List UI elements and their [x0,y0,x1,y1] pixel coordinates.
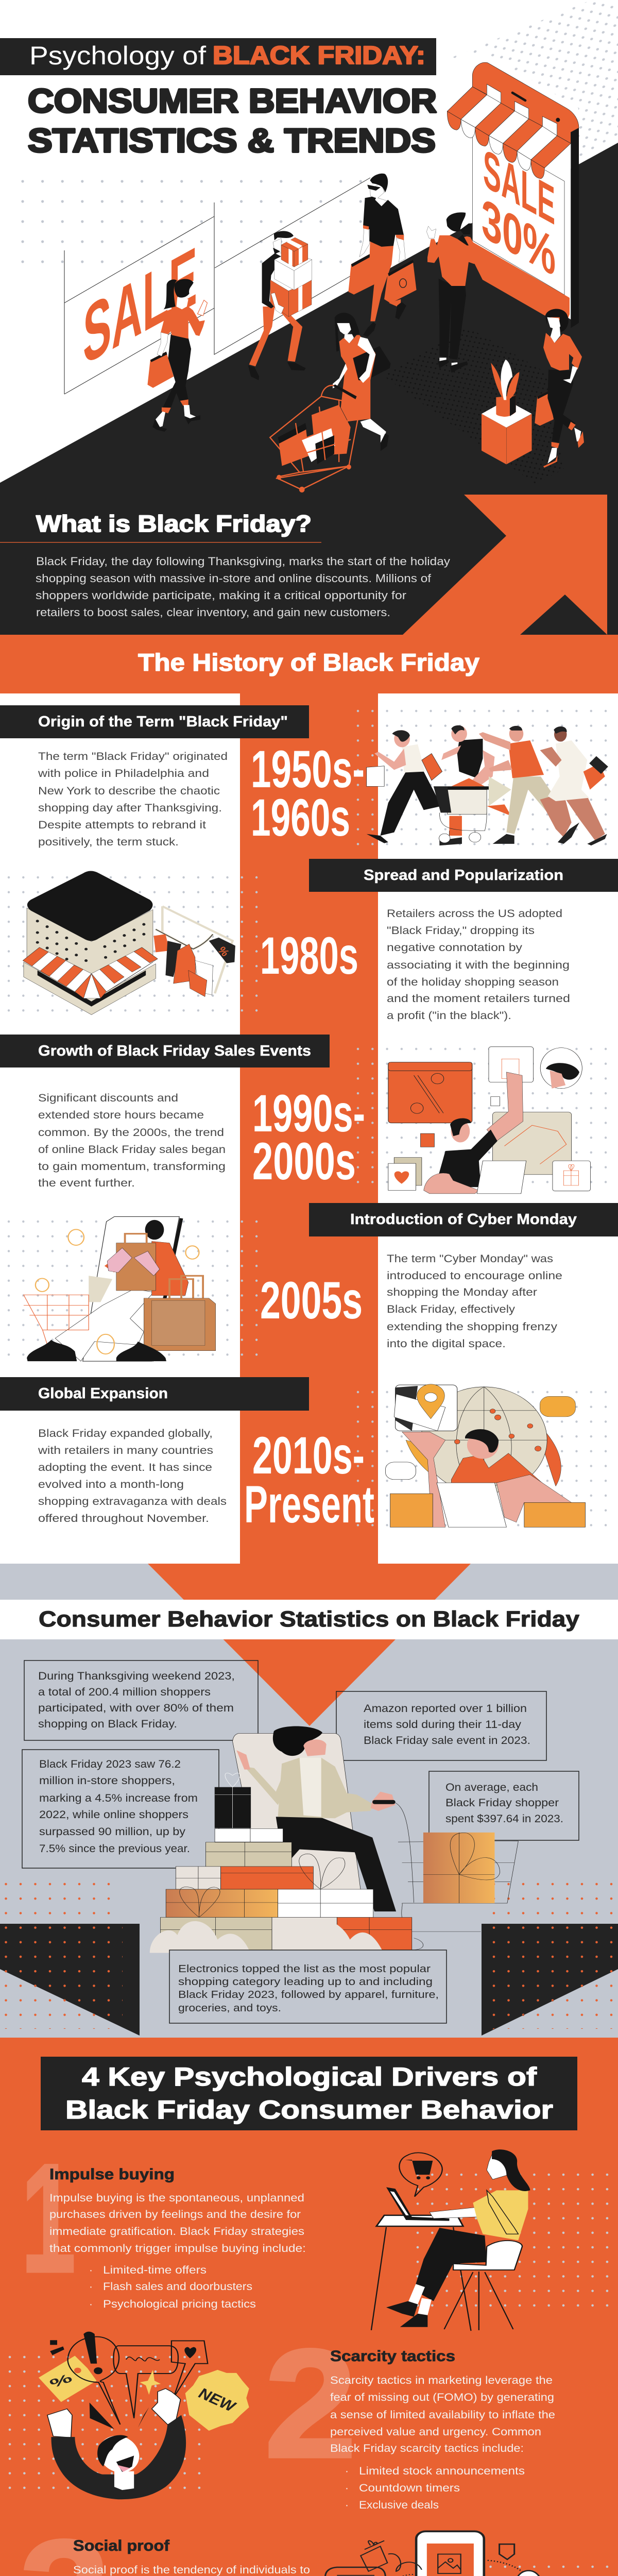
text: origin: The term "Black Friday" originated [38,751,228,762]
driver 2 heading: Scarcity tactics [330,2348,455,2365]
text: origin: with police in Philadelphia and [38,768,209,779]
stat box 5 [169,1950,447,2023]
text: origin: positively, the term stuck. [38,836,179,848]
stat box 4: Black Friday shopper [445,1797,559,1809]
drivers heading: 4 Key Psychological Drivers of [82,2062,537,2091]
hand [236,1750,250,1770]
message bubble [113,2346,178,2418]
gift stack [160,1773,412,1951]
phone picture [427,2544,474,2576]
inner shirt [300,1758,321,1817]
left awning [23,947,92,992]
what is black friday heading: What is Black Friday? [36,511,312,537]
bubble white [385,1462,416,1480]
driver 2 bullets: Exclusive deals [359,2499,439,2511]
stat box 1: a total of 200.4 million shoppers [38,1686,211,1698]
phone speaker [512,93,525,100]
bar: growth [0,1035,330,1067]
shopping cart [270,384,363,493]
stat box 3: 7.5% since the previous year. [39,1843,190,1855]
text: global: Black Friday expanded globally, [38,1428,213,1439]
phone frame [83,1216,179,1361]
date: 1950s-1960s: 1950s- [251,740,365,799]
shoppers right group [426,212,584,468]
cart frame [390,1801,518,1950]
shopper on right [535,309,584,468]
hair [145,1220,164,1240]
new text: NEW [195,2385,239,2415]
plus box [421,1133,434,1147]
driver 2 text [330,2375,555,2454]
dotted arc [488,2561,546,2576]
driver 1 bullets: · [89,2281,93,2293]
map card [394,1384,457,1431]
shield [500,2544,514,2560]
bar: origin: Origin of the Term "Black Friday" [38,714,288,730]
illustration: shopper with gifts [150,1726,518,1953]
phone [416,2531,484,2576]
arm [430,2208,477,2218]
what is black friday text: shopping season with massive in-store and online discounts. Millions of [36,572,432,585]
awning stripes [447,87,571,179]
bar: global [0,1377,309,1411]
timeline column [240,693,378,1564]
person glyph [50,2340,64,2355]
left arm [244,1760,300,1805]
wall sale text: SALE [83,229,197,383]
date: 1950s-1960s: 1960s [251,788,350,847]
illustration: social phone [325,2531,557,2576]
text: cyber monday: The term "Cyber Monday" was [387,1253,553,1265]
text: global: shopping extravaganza with deals [38,1496,227,1507]
arms body [51,2415,186,2499]
stat box 2: Black Friday sale event in 2023. [364,1735,530,1747]
gift box card [553,1161,590,1191]
main title: CONSUMER BEHAVIOR [28,82,437,120]
dotted line [388,2574,414,2576]
consumer section background [0,1564,618,2038]
dots: history [2,704,611,1527]
text: spread: associating it with the beginning [387,959,570,971]
stat box 4 [429,1771,579,1840]
text: growth: of online Black Friday sales began [38,1144,226,1156]
text: global: evolved into a month-long [38,1479,184,1490]
shopper pointing at phone [426,212,483,373]
timeline arrow [148,1564,471,1726]
date: 1990s-2000s [252,1084,365,1191]
paper bag [116,1243,156,1291]
driver 1 text: that commonly trigger impulse buying include: [49,2243,306,2255]
big bag [144,1276,216,1351]
corner awning fan [75,974,107,998]
illustration: running shoppers [367,725,608,845]
shirt [473,2190,528,2240]
driver 2 bullets: · [345,2499,349,2511]
new badge [185,2370,249,2431]
driver 1 bullets: Flash sales and doorbusters [103,2281,252,2293]
mouth [116,2455,134,2472]
stat box 1: shopping on Black Friday. [38,1718,177,1730]
driver 2 text: fear of missing out (FOMO) by generating [330,2392,554,2403]
stat box 3: million in-store shoppers, [39,1775,175,1787]
right awning [92,947,158,992]
orange arrow [403,495,607,635]
left corner shape [0,1924,140,2036]
hair [273,1726,322,1756]
phone percent text: 30% [482,185,556,289]
globe [421,1387,547,1494]
bar: spread: Spread and Popularization [364,867,563,884]
hero panel [0,0,618,635]
text: cyber monday [387,1253,562,1350]
pants [55,1289,153,1361]
date: 1990s-2000s: 2000s [252,1132,356,1191]
man pointing [479,726,568,844]
phone orange base [473,242,570,323]
driver 2 bullets: · [345,2465,349,2477]
wall frames [64,178,370,394]
orange dots [0,1877,613,2029]
bar: growth: Growth of Black Friday Sales Events [38,1043,311,1059]
bar: spread [309,859,618,892]
shoes [27,1340,166,1361]
driver 2 number: 2 [264,2317,357,2490]
title highlight: BLACK FRIDAY: [213,42,425,70]
orange dots on corners [0,1924,613,2032]
desk [371,2227,471,2331]
orange browser window [388,1062,472,1123]
stat box 5: Black Friday 2023, followed by apparel, furniture, [178,1989,439,2001]
date: 2005s: 2005s [260,1271,363,1330]
bubble yellow [540,1396,575,1417]
phone [233,1734,365,1920]
driver 1 text: immediate gratification. Black Friday strategies [49,2226,304,2238]
stat box 1 [24,1660,258,1740]
bar: cyber monday: Introduction of Cyber Monday [350,1211,577,1228]
head [92,2431,146,2477]
exclamation bubble [68,2332,120,2425]
stat box 1: participated, with over 80% of them [38,1702,234,1714]
text: spread: and the moment retailers turned [387,993,570,1005]
stat box 3: Black Friday 2023 saw 76.2 [39,1758,181,1770]
text: cyber monday: extending the shopping frenzy [387,1321,558,1333]
illustration: online shopping [388,1047,590,1194]
text: cyber monday: shopping the Monday after [387,1286,537,1298]
drivers heading [41,2057,577,2130]
picture icon [438,2554,461,2573]
store base [24,962,156,1015]
coat [152,1241,188,1296]
store walls [27,908,153,1002]
clouds [150,1920,384,1953]
dot field right [443,0,618,160]
gold gift in cart [423,1833,500,1903]
text: origin [38,751,228,848]
store roof [27,871,153,941]
tag percent: % [47,2371,75,2391]
text: global [38,1428,227,1524]
main title [28,82,437,159]
text: growth: common. By the 2000s, the trend [38,1127,224,1139]
gift card [489,1047,533,1082]
text: cyber monday: Black Friday, effectively [387,1303,516,1315]
speech bubble [325,2567,385,2576]
head [487,2153,508,2179]
gift icon [502,1059,519,1079]
hand arm [487,2190,518,2234]
what is black friday text [36,555,450,619]
gift icon [360,2540,387,2571]
stat box 5: Electronics topped the list as the most popular [178,1963,431,1975]
phone storefront [447,62,579,328]
driver 2 text: Black Friday scarcity tactics include: [330,2443,524,2454]
text: global: offered throughout November. [38,1513,209,1524]
bar: origin [0,705,309,738]
bar: global: Global Expansion [38,1385,168,1402]
hand and handle [370,1792,396,1811]
open hand [152,2388,181,2425]
arm [487,1072,523,1141]
heart bubble [171,2341,208,2398]
laptop [477,1161,526,1194]
heart card [388,1158,422,1190]
what is black friday text: shoppers worldwide participate, making it a critical opportunity for [36,589,406,602]
date: 2010s-present: 2010s- [252,1426,365,1485]
text: growth: extended store hours became [38,1109,204,1121]
driver 2 text: perceived value and urgency. Common [330,2426,541,2438]
driver 2 bullets: Limited stock announcements [359,2465,525,2477]
shopper with cart [333,313,391,451]
driver 1 number: 1 [21,2131,76,2304]
stat box 4: spent $397.64 in 2023. [445,1813,563,1825]
dots: drivers [3,2167,609,2576]
woman with bags [367,730,442,843]
floor dots [384,327,564,484]
stat box 3: 2022, while online shoppers [39,1809,188,1821]
driver 1 text: Impulse buying is the spontaneous, unplanned [49,2192,304,2204]
hair [492,2149,530,2191]
woman in white dress [540,726,608,845]
consumer heading band: Consumer Behavior Statistics on Black Friday [39,1607,579,1632]
stat box 5: shopping category leading up to and including [178,1976,433,1988]
driver 1 bullets: · [89,2298,93,2310]
yellow sweep [406,1440,430,1473]
shopper with sunglasses [348,174,417,337]
history heading: The History of Black Friday [138,649,479,676]
text: spread: Retailers across the US adopted [387,908,562,920]
person [402,1429,572,1527]
beige browser [493,1112,572,1175]
text: growth: the event further. [38,1177,135,1189]
text: origin: shopping day after Thanksgiving. [38,802,222,814]
phone edge [152,1218,181,1361]
stat box 3: marking a 4.5% increase from [39,1792,198,1804]
man with laptop [424,1118,497,1194]
jacket [278,1758,374,1818]
driver 3 heading: Social proof [73,2537,170,2554]
star [140,2370,161,2395]
date: 1990s-2000s: 1990s- [252,1084,365,1143]
clothing rack [153,906,235,996]
phone body [472,86,571,319]
text: cyber monday: introduced to encourage online [387,1270,562,1282]
check [516,2571,541,2576]
driver 2 text: a sense of limited availability to inflate the [330,2409,555,2421]
text: global: adopting the event. It has since [38,1462,212,1473]
driver 2 bullets: Countdown timers [359,2482,460,2494]
percent tag [39,2356,96,2402]
stat box 2 [336,1691,546,1760]
illustration: store [23,871,235,1015]
plant on cube [482,360,532,464]
driver 1 heading: Impulse buying [49,2166,175,2183]
small plus box [491,1097,500,1106]
shopper with phone [147,279,207,432]
title bar [0,38,436,75]
driver 1 bullets: · [89,2264,93,2276]
coins [36,1229,199,1354]
illustration: woman at laptop [371,2149,530,2331]
title line 1: Psychology of [29,41,206,70]
dot field left [15,174,373,267]
illustration: woman in phone [24,1216,216,1361]
stat box 2: items sold during their 11-day [364,1719,522,1731]
boxes [390,1494,433,1527]
date: 2010s-present: Present [244,1475,374,1534]
text: origin: Despite attempts to rebrand it [38,819,206,831]
text: growth: to gain momentum, transforming [38,1161,226,1173]
history band [0,635,618,693]
woman portrait [540,1048,582,1089]
stat box 3: surpassed 90 million, up by [39,1826,186,1838]
text: spread: "Black Friday," dropping its [387,925,535,937]
stat box 5: groceries, and toys. [178,2003,281,2014]
chair [444,2241,522,2330]
pants [414,2228,487,2301]
hands [107,1248,160,1276]
text: growth [38,1092,226,1189]
date: 1950s-1960s [251,740,365,847]
illustration: global shopping [385,1384,585,1527]
phone top frame [472,62,579,143]
driver 2 text: Scarcity tactics in marketing leverage the [330,2375,553,2386]
laptop [386,2187,449,2221]
what is black friday text: Black Friday, the day following Thanksgiving, marks the start of the holiday [36,555,450,568]
awning white scallops [461,95,557,171]
text: spread: negative connotation by [387,942,523,954]
bar: cyber monday [309,1203,618,1236]
cart [24,1295,89,1345]
date: 1980s: 1980s [260,926,358,985]
face [303,1739,327,1756]
screen frame [472,138,564,295]
driver 2 bullets: · [345,2482,349,2494]
speech bubble with cart [399,2153,442,2197]
right corner shape [482,1924,618,2036]
stat box 3 [22,1750,219,1868]
shopper carrying boxes [248,231,312,380]
text: growth: Significant discounts and [38,1092,178,1104]
stat box 4: On average, each [445,1782,538,1793]
driver 1 text [49,2192,306,2255]
phone camera [556,118,560,122]
swirl [388,2554,422,2571]
consumer heading band [0,1600,618,1639]
text: origin: New York to describe the chaotic [38,785,220,797]
text: global: with retailers in many countries [38,1445,213,1456]
what is black friday text: retailers to boost sales, clear inventory, and gain new customers. [36,606,390,619]
driver 1 bullets [89,2264,256,2310]
background dark floor [0,143,618,635]
man pushing cart [434,725,511,845]
socks and shoes [408,2284,432,2315]
laptop [437,1483,506,1527]
driver 3 text: Social proof is the tendency of individuals to [73,2564,310,2576]
main title: STATISTICS & TRENDS [28,122,436,159]
phone dark side [571,128,579,328]
text: spread: a profit ("in the black"). [387,1010,511,1022]
fist hand [47,2409,72,2437]
driver 1 bullets: Limited-time offers [103,2264,207,2276]
orange arc [540,1430,561,1486]
text: cyber monday: into the digital space. [387,1338,506,1350]
hair [97,2435,128,2467]
date: 2010s-present [244,1426,374,1534]
store interior [38,970,146,1007]
neck [114,2471,134,2490]
text: spread: of the holiday shopping season [387,976,559,988]
shoppers left group [147,174,417,451]
pants [276,1817,396,1911]
driver 2 bullets [345,2465,525,2511]
drivers heading: Black Friday Consumer Behavior [65,2095,553,2124]
driver 1 text: purchases driven by feelings and the desire for [49,2209,301,2221]
stat box 1: During Thanksgiving weekend 2023, [38,1670,235,1682]
text: spread [387,908,570,1022]
driver 1 bullets: Psychological pricing tactics [103,2298,256,2310]
stat box 2: Amazon reported over 1 billion [364,1703,527,1715]
rack tag percent: % [215,945,232,959]
price tag [505,1125,566,1164]
torn beige [89,1276,112,1302]
burst [90,2402,149,2429]
illustration: excited shopper [39,2332,249,2499]
wall holes [38,921,144,964]
drivers section background [0,2038,618,2576]
